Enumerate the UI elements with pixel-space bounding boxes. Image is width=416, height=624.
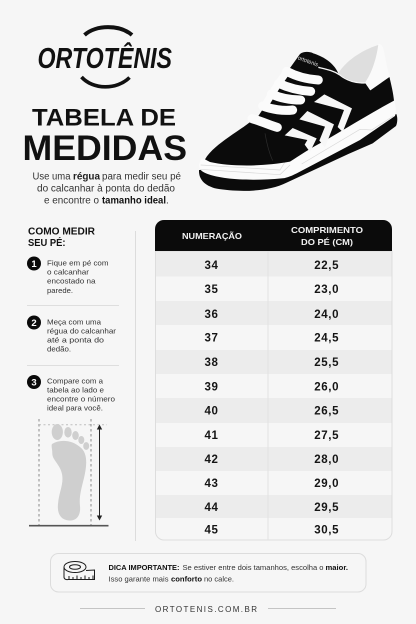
callout: important tip: Isso garante mais: [108, 574, 169, 584]
callout: important tip: [50, 554, 366, 592]
arrow: foot length: [97, 424, 102, 520]
step 2: até a ponta do: [47, 336, 104, 345]
upper: [205, 52, 394, 165]
table rows: 24,5: [314, 333, 339, 345]
subtitle text: .: [166, 196, 169, 206]
step 3: tabela ao lado e: [47, 386, 104, 394]
step 3: [27, 375, 115, 413]
callout: important tip: conforto: [171, 574, 202, 584]
table rows: 41: [204, 430, 218, 442]
step 1: o calcanhar: [47, 268, 90, 277]
tongue logo: ortotenis: [297, 56, 319, 69]
stripes: [285, 94, 352, 152]
table rows: 28,0: [314, 454, 339, 466]
table rows: 42: [204, 454, 218, 466]
foot measurement diagram: [29, 419, 108, 528]
callout: important tip: Se estiver entre dois tamanhos, escolha o: [182, 563, 324, 572]
heading: como medir: COMO MEDIR: [28, 226, 95, 238]
heel collar: [365, 44, 390, 90]
step 2: dedão.: [47, 345, 71, 354]
table rows: 26,0: [314, 382, 339, 394]
column divider: [134, 231, 136, 541]
table rows: 35: [204, 284, 218, 296]
table rows: 45: [204, 524, 218, 536]
table rows: 38: [204, 357, 218, 369]
table rows: 44: [204, 502, 218, 514]
stitching: [265, 133, 273, 161]
table rows: 30,5: [314, 524, 339, 536]
subtitle text: para medir seu pé: [102, 172, 181, 182]
table rows: 29,0: [314, 478, 339, 490]
table rows: 23,0: [314, 284, 339, 296]
table rows: 22,5: [314, 260, 339, 272]
title: Tabela de Medidas: MEDIDAS: [22, 129, 187, 168]
table rows: 29,5: [314, 502, 339, 514]
step 2: 2: [31, 318, 37, 329]
subtitle text: e encontre o: [44, 196, 99, 206]
size table: [155, 220, 392, 540]
shoe illustration: [199, 44, 397, 191]
lining: [338, 45, 382, 83]
logo: Ortotênis: ORTOTÊNIS: [38, 41, 173, 75]
table rows: 26,5: [314, 406, 339, 418]
table header: [155, 220, 392, 251]
heading: como medir: [28, 226, 95, 249]
table rows: 25,5: [314, 357, 339, 369]
table rows: 34: [204, 260, 218, 272]
table rows: 27,5: [314, 430, 339, 442]
title: Tabela de Medidas: TABELA DE: [32, 104, 176, 132]
step 2: Meça com uma: [47, 318, 102, 326]
table rows: 37: [204, 333, 218, 345]
table header: DO PÉ (CM): [301, 236, 353, 247]
step 3: encontre o número: [47, 394, 115, 404]
table rows: 43: [204, 478, 218, 490]
icon: foot: [52, 424, 89, 521]
callout: important tip: maior.: [326, 563, 348, 572]
subtitle text: régua: [73, 172, 100, 182]
logo: Ortotênis: [38, 27, 173, 87]
table header: COMPRIMENTO: [291, 225, 364, 235]
icon: measuring tape: [64, 562, 94, 580]
step 1: 1: [31, 259, 37, 270]
midsole: [199, 99, 396, 180]
step 3: ideal para você.: [47, 404, 103, 413]
table body: [156, 251, 392, 540]
step 1: parede.: [47, 286, 73, 295]
step 3: Compare com a: [47, 376, 104, 386]
step 2: régua do calcanhar: [47, 326, 117, 336]
table rows: 39: [204, 382, 218, 394]
table rows: 40: [204, 406, 218, 418]
subtitle text: tamanho ideal: [102, 196, 166, 206]
step 1: [27, 256, 108, 295]
subtitle text: Use uma: [32, 172, 71, 182]
step 2: [27, 316, 117, 354]
subtitle text: [32, 172, 181, 206]
step 1: Fique em pé com: [47, 258, 108, 268]
subtitle text: do calcanhar à ponta do dedão: [37, 184, 175, 194]
table rows: 24,0: [314, 309, 339, 321]
outsole: [199, 114, 397, 191]
collar trim: [318, 67, 366, 83]
callout: important tip: no calce.: [204, 574, 234, 584]
table rows: 36: [204, 309, 218, 321]
table header: NUMERAÇÃO: [182, 231, 243, 241]
step 3: 3: [31, 378, 37, 388]
table rows: [204, 260, 339, 536]
footer: website: ORTOTENIS.COM.BR: [155, 605, 257, 614]
heading: como medir: SEU PÉ:: [28, 236, 66, 249]
callout: important tip: DICA IMPORTANTE:: [108, 563, 180, 572]
step 1: encostado na: [47, 277, 96, 286]
laces: [252, 71, 318, 127]
title: Tabela de Medidas: [22, 104, 187, 168]
